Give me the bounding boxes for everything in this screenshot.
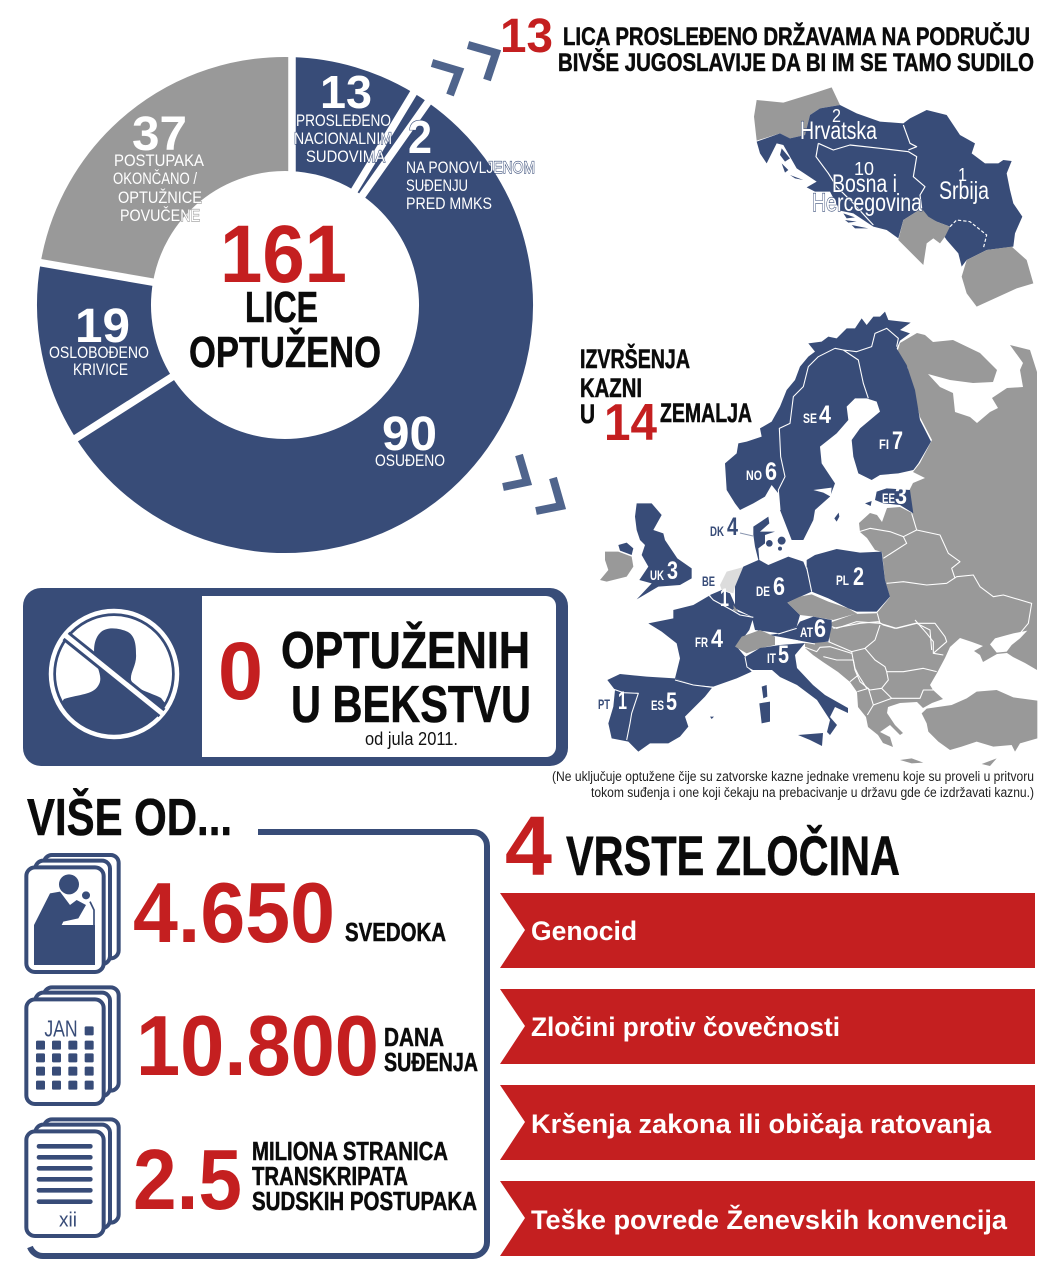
- stat: trial days: 10.800: [136, 999, 379, 1094]
- country labels: 2: [853, 563, 864, 591]
- segment label: 90 convicted: 90: [382, 408, 437, 461]
- segment label: 19 acquitted: 19: [75, 300, 130, 353]
- segment label: 19 acquitted: OSLOBOĐENO: [49, 343, 149, 362]
- country labels: 1: [618, 687, 627, 715]
- country labels: 1: [720, 584, 729, 612]
- country labels: 4: [819, 401, 831, 429]
- donut centre: total: OPTUŽENO: [189, 327, 381, 377]
- stat: transcript pages: SUDSKIH POSTUPAKA: [252, 1186, 477, 1216]
- stat: trial days: SUĐENJA: [384, 1047, 478, 1077]
- label: Bosna i Hercegovina: [812, 159, 922, 217]
- donut chart: 161 accused: [19, 39, 551, 571]
- Italy and Sicily: [745, 643, 848, 746]
- country labels: 3: [667, 557, 678, 585]
- icon: transcript pages: [26, 1119, 119, 1236]
- panel frame: statistics: [30, 832, 487, 1256]
- segment label: 19 acquitted: [49, 300, 149, 379]
- heading: 13 transferred: 13: [500, 10, 553, 63]
- segment label: 19 acquitted: KRIVICE: [73, 360, 128, 379]
- label: Hrvatska: Hrvatska: [800, 117, 877, 145]
- label: Bosna i Hercegovina: 10: [854, 159, 874, 179]
- heading: 13 transferred: [500, 10, 1034, 77]
- country labels: 5: [778, 641, 789, 669]
- segment label: 2 retrial: [406, 111, 535, 213]
- ribbon: violations of laws of war: Kršenja zakona ili običaja ratovanja: [531, 1109, 992, 1139]
- heading: sentences in 14 countries: ZEMALJA: [660, 398, 752, 428]
- ribbon: genocide: Genocid: [531, 916, 637, 946]
- segment label: 37 terminated: OKONČANO /: [113, 169, 197, 188]
- segment label: 13 forwarded: PROSLEĐENO: [296, 111, 391, 130]
- heading: 4 types of crime: [505, 799, 900, 893]
- ribbon: genocide: [500, 893, 1035, 968]
- donut centre: total: [189, 209, 381, 377]
- country labels: 6: [773, 573, 785, 601]
- country labels: BE: [702, 573, 715, 589]
- icon: crossed-out person: [51, 611, 177, 745]
- country labels: UK: [650, 567, 664, 583]
- arrow: towards Europe map: [503, 455, 561, 511]
- Nordic countries and Estonia: [725, 312, 931, 540]
- segment label: 37 terminated: 37: [132, 108, 187, 161]
- country labels: IT: [767, 650, 776, 666]
- heading: sentences in 14 countries: KAZNI: [580, 373, 642, 403]
- stat: transcript pages: TRANSKRIPATA: [252, 1161, 408, 1191]
- label: Srbija: Srbija: [939, 177, 989, 205]
- country labels: SE: [803, 410, 817, 426]
- country labels: FI: [879, 436, 889, 452]
- stat: witnesses: SVEDOKA: [345, 917, 446, 947]
- fugitives text: 0: [218, 626, 263, 717]
- country labels: NO: [746, 467, 762, 483]
- ribbon: crimes against humanity: Zločini protiv čovečnosti: [531, 1012, 840, 1042]
- gray non-host countries: [600, 333, 1037, 766]
- segment label: 2 retrial: PRED MMKS: [406, 194, 492, 213]
- country labels: 3: [895, 482, 907, 510]
- heading: sentences in 14 countries: 14: [604, 394, 657, 452]
- icon: calendar: [26, 987, 119, 1104]
- panel: zero fugitives: [23, 588, 568, 766]
- map: former Yugoslavia: [754, 87, 1033, 307]
- country labels: 7: [892, 427, 903, 455]
- segment label: 37 terminated: POSTUPAKA: [114, 151, 205, 170]
- fugitives text: U BEKSTVU: [291, 676, 531, 734]
- country labels: 6: [765, 458, 777, 486]
- label: Bosna i Hercegovina: Hercegovina: [812, 189, 922, 217]
- segment label: 13 forwarded: SUDOVIMA: [306, 147, 386, 166]
- segment label: 2 retrial: SUĐENJU: [406, 176, 468, 195]
- fugitives text: OPTUŽENIH: [281, 621, 530, 680]
- ribbon: Geneva conventions: Teške povrede Ženevskih konvencija: [531, 1204, 1008, 1235]
- segment label: 90 convicted: [375, 408, 445, 470]
- ribbon: Geneva conventions: [500, 1181, 1035, 1256]
- country labels: 4: [727, 513, 738, 541]
- country labels: DK: [710, 523, 724, 539]
- heading: sentences in 14 countries: U: [580, 399, 595, 429]
- country labels: EE: [882, 490, 895, 506]
- segment label: 2 retrial: 2: [408, 111, 432, 163]
- heading: sentences in 14 countries: IZVRŠENJA: [580, 343, 690, 374]
- central Europe: Denmark, Germany, Poland, Austria: [735, 517, 890, 644]
- donut centre: total: LICE: [245, 283, 318, 332]
- segment label: 37 terminated: POVUČENE: [120, 206, 200, 225]
- country labels: [598, 401, 907, 716]
- segment label: 13 forwarded: [294, 66, 392, 166]
- country labels: 5: [666, 688, 677, 716]
- label: Srbija: [939, 165, 989, 205]
- segment label: 37 terminated: [113, 108, 205, 225]
- label: Hrvatska: [800, 106, 877, 145]
- country labels: PL: [836, 572, 849, 588]
- map: Europe: [598, 312, 1037, 766]
- country labels: 6: [814, 615, 826, 643]
- label: Hrvatska: 2: [832, 106, 841, 126]
- stat: transcript pages: [133, 1133, 477, 1228]
- heading: 4 types of crime: VRSTE ZLOČINA: [566, 824, 900, 887]
- country labels: PT: [598, 696, 610, 712]
- label: Bosna i Hercegovina: Bosna i: [832, 170, 897, 198]
- country labels: ES: [651, 697, 664, 713]
- donut centre: total: 161: [220, 209, 347, 300]
- segment label: 13 forwarded: 13: [320, 66, 372, 118]
- label: Srbija: 1: [958, 165, 967, 185]
- stat: transcript pages: 2.5: [133, 1133, 242, 1228]
- icon: witness at podium: [26, 855, 119, 972]
- stat: trial days: DANA: [384, 1022, 444, 1052]
- heading: more than: VIŠE OD...: [27, 788, 232, 847]
- arrow: towards former Yugoslavia: [432, 45, 496, 95]
- stat: witnesses: [133, 866, 446, 961]
- western Europe: UK, France, Iberia, Belgium: [607, 503, 775, 752]
- icon: calendar: JAN: [44, 1016, 78, 1042]
- segment label: 13 forwarded: NACIONALNIM: [294, 129, 392, 148]
- country labels: AT: [800, 624, 813, 640]
- fugitives text: od jula 2011.: [365, 729, 458, 749]
- country labels: DE: [756, 583, 770, 599]
- country labels: FR: [695, 634, 708, 650]
- segment label: 37 terminated: OPTUŽNICE: [118, 188, 202, 207]
- heading: 4 types of crime: 4: [505, 799, 552, 893]
- stat: transcript pages: MILIONA STRANICA: [252, 1136, 448, 1166]
- icon: transcript pages: xii: [59, 1210, 77, 1232]
- ribbon: violations of laws of war: [500, 1085, 1035, 1160]
- heading: sentences in 14 countries: [580, 343, 752, 452]
- fugitives text: [218, 621, 531, 749]
- country labels: 4: [711, 625, 723, 653]
- ribbon: crimes against humanity: [500, 989, 1035, 1064]
- segment label: 90 convicted: OSUĐENO: [375, 451, 445, 470]
- stat: witnesses: 4.650: [133, 866, 335, 961]
- segment label: 2 retrial: NA PONOVLJENOM: [406, 158, 535, 177]
- footnote: [552, 769, 1034, 800]
